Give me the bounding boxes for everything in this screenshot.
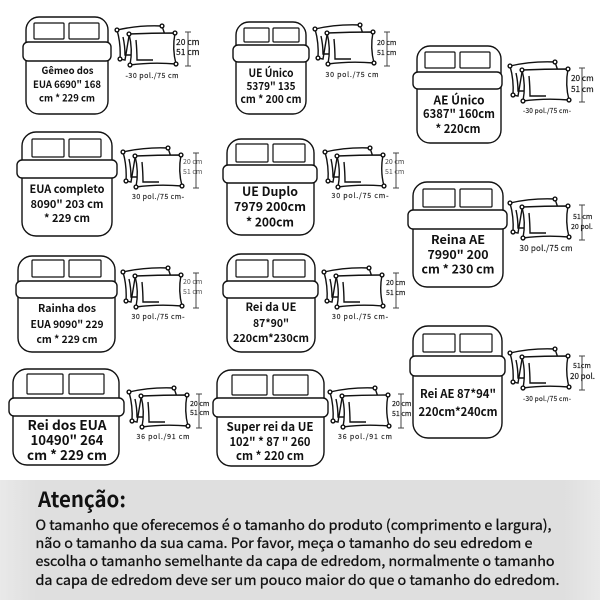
bed: Rei AE: Rei AE 87*94" xyxy=(420,385,496,402)
pillow dimensions: Gêmeo dos EUA xyxy=(115,24,200,81)
pillow dimensions: UE Duplo: 51 cm xyxy=(385,167,404,177)
bed: Super rei da UE: Super rei da UE xyxy=(226,418,314,435)
pillow dimensions: EUA completo: 51 cm xyxy=(183,167,202,177)
pillow dimensions: UE Duplo: 20 cm xyxy=(385,157,404,167)
pillow dimensions: AE Único xyxy=(508,60,594,115)
bed: Reina AE xyxy=(408,182,507,287)
bed: AE Único: 6387" 160cm xyxy=(423,105,495,122)
pillow dimensions: UE Único: 30 pol./75 cm xyxy=(326,70,378,80)
pillow dimensions: UE Único: 20 cm xyxy=(377,38,396,48)
pillow dimensions: Reina AE: 30 pol./75 cm xyxy=(520,243,572,254)
panel: attention note xyxy=(0,480,600,600)
pillow dimensions: Reina AE: 20 pol. xyxy=(571,222,593,232)
pillow dimensions: Reina AE xyxy=(508,197,593,254)
pillow dimensions: Rainha dos EUA: 20 cm xyxy=(183,277,202,287)
bed: Gêmeo dos EUA: Gêmeo dos xyxy=(42,62,94,77)
bed: EUA completo: EUA completo xyxy=(30,181,105,197)
bed: Super rei da UE: 102" * 87 " 260 xyxy=(230,433,310,450)
pillow dimensions: AE Único: 20 cm xyxy=(571,72,594,84)
bed: Super rei da UE: cm * 220 cm xyxy=(236,447,304,464)
bed: Rei da UE xyxy=(223,254,318,352)
bed: UE Único: UE Único xyxy=(248,65,294,81)
bed: Reina AE: Reina AE xyxy=(431,231,485,248)
pillow dimensions: Rainha dos EUA xyxy=(121,266,202,322)
bed: Rei AE xyxy=(410,326,505,438)
pillow dimensions: UE Duplo: 30 pol./75 cm- xyxy=(332,191,389,201)
note text: não o tamanho da sua cama. Por favor, meça o tamanho do seu edredom e xyxy=(36,533,533,553)
note text: escolha o tamanho semelhante da capa de edredom, normalmente o tamanho xyxy=(36,551,554,571)
bed: UE Duplo xyxy=(223,139,317,235)
note text: O tamanho que oferecemos é o tamanho do produto (comprimento e largura), xyxy=(36,515,552,535)
pillow dimensions: Rei AE: 51cm xyxy=(573,361,591,371)
bed: Rainha dos EUA: Rainha dos xyxy=(38,301,96,316)
pillow dimensions: Rei da UE: 51 cm xyxy=(386,288,405,298)
pillow dimensions: EUA completo: 20 cm xyxy=(183,157,202,167)
bed: UE Único: cm * 200 cm xyxy=(240,91,302,107)
pillow dimensions: EUA completo xyxy=(121,146,202,202)
bed: AE Único xyxy=(413,46,502,143)
pillow dimensions: Rei da UE: 30 pol./75 cm- xyxy=(332,312,389,322)
pillow dimensions: UE Único: 51 cm xyxy=(377,48,396,58)
pillow dimensions: EUA completo: 30 pol./75 cm- xyxy=(132,192,185,202)
bed: Rei dos EUA xyxy=(9,369,124,465)
pillow dimensions: Rainha dos EUA: 51 cm xyxy=(183,287,202,297)
pillow dimensions: Rei AE: 20 pol. xyxy=(570,371,595,382)
bed: Rei AE: 220cm*240cm xyxy=(418,403,498,420)
bed: UE Duplo: UE Duplo xyxy=(242,181,298,200)
bed: UE Único: 5379" 135 xyxy=(246,78,296,94)
bed: UE Duplo: 7979 200cm xyxy=(234,196,306,215)
bed: Rainha dos EUA: cm * 229 cm xyxy=(36,332,98,347)
pillow dimensions: Reina AE: 51 cm xyxy=(573,212,592,222)
pillow dimensions: Super rei da UE: 51 cm xyxy=(392,409,411,419)
bed: UE Duplo: * 200cm xyxy=(246,212,294,230)
bed: Rei dos EUA: Rei dos EUA xyxy=(28,414,107,434)
bed: AE Único: AE Único xyxy=(433,92,484,108)
pillow dimensions: Gêmeo dos EUA: 51 cm xyxy=(176,46,200,58)
bed: Gêmeo dos EUA: EUA 6690" 168 xyxy=(33,76,101,91)
bed: Reina AE: 7990" 200 xyxy=(428,246,488,263)
bed: Rainha dos EUA: EUA 9090" 229 xyxy=(30,317,104,332)
pillow dimensions: Super rei da UE: 20 cm xyxy=(392,399,411,409)
note text: da capa de edredom deve ser um pouco maior do que o tamanho do edredom. xyxy=(36,570,560,590)
pillow dimensions: Rei AE xyxy=(508,347,595,403)
heading: Atenção: Atenção: xyxy=(37,484,126,514)
bed: Rei da UE: 220cm*230cm xyxy=(233,330,309,346)
pillow dimensions: Super rei da UE xyxy=(328,386,411,442)
pillow dimensions: Rei dos EUA: 36 pol./91 cm xyxy=(136,432,190,442)
bed: EUA completo: 8090" 203 cm xyxy=(30,196,104,212)
bed: Reina AE: cm * 230 cm xyxy=(422,260,494,278)
pillow dimensions: Rei dos EUA: 20 cm xyxy=(190,399,209,409)
pillow dimensions: Rainha dos EUA: 30 pol./75 cm- xyxy=(132,312,185,322)
bed: Rei da UE: 87*90" xyxy=(253,315,289,331)
note text xyxy=(36,515,560,590)
bed: Rei da UE: Rei da UE xyxy=(246,299,297,315)
bed: Super rei da UE xyxy=(213,370,328,466)
pillow dimensions: Gêmeo dos EUA: 20 cm xyxy=(176,36,200,48)
bed: Gêmeo dos EUA: cm * 229 cm xyxy=(39,90,95,104)
pillow dimensions: Rei dos EUA: 51 cm xyxy=(190,408,209,418)
bed: Rei dos EUA: cm * 229 cm xyxy=(27,444,107,464)
pillow dimensions: AE Único: 51 cm xyxy=(571,83,594,95)
pillow dimensions: Rei AE: -30 pol./75 cm- xyxy=(523,393,571,403)
bed: AE Único: * 220cm xyxy=(436,120,480,137)
bed: EUA completo xyxy=(17,132,117,236)
bed: EUA completo: * 229 cm xyxy=(44,210,90,226)
pillow dimensions: Rei dos EUA xyxy=(127,386,209,442)
pillow dimensions: UE Único xyxy=(313,23,396,80)
pillow dimensions: UE Duplo xyxy=(323,146,404,201)
bed: UE Único xyxy=(233,22,309,114)
bed: Rei dos EUA: 10490" 264 xyxy=(30,429,104,449)
pillow dimensions: Rei da UE: 20 cm xyxy=(386,278,405,288)
pillow dimensions: Gêmeo dos EUA: -30 pol./75 cm xyxy=(126,71,178,81)
pillow dimensions: AE Único: -30 pol./75 cm- xyxy=(523,105,571,115)
pillow dimensions: Rei da UE xyxy=(322,266,405,322)
pillow dimensions: Super rei da UE: 36 pol./91 cm xyxy=(338,432,392,442)
bed: Rainha dos EUA xyxy=(16,256,117,352)
bed: Gêmeo dos EUA xyxy=(23,17,111,114)
